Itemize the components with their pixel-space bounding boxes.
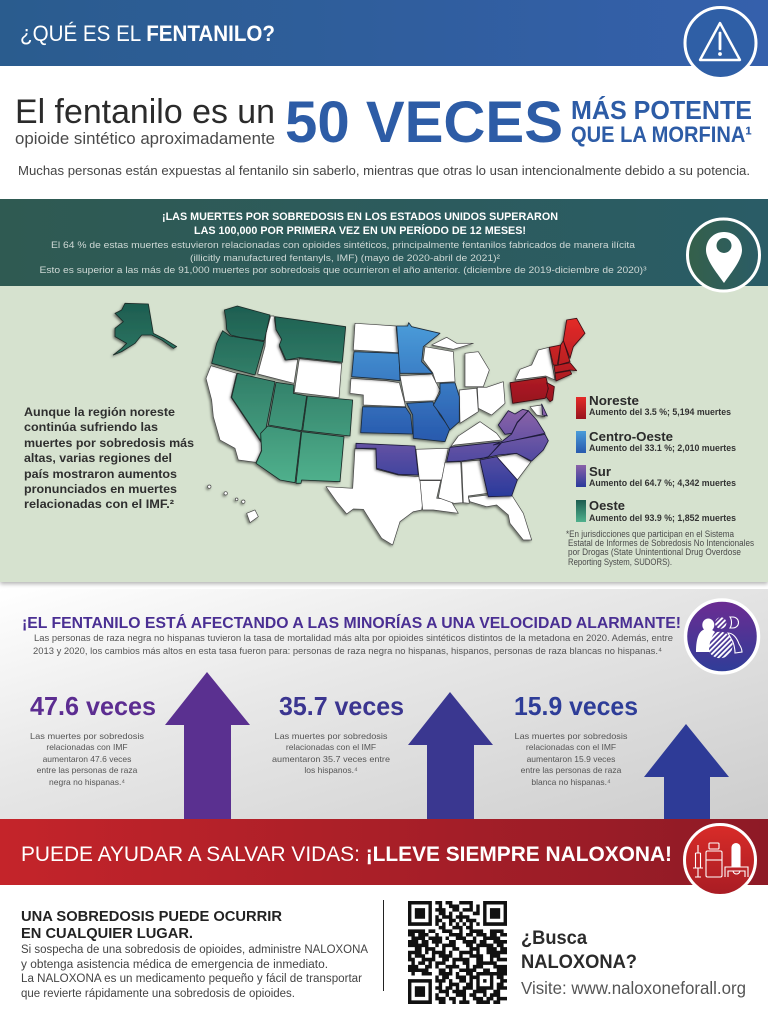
stat text: 47.6: negra no hispanas.⁴	[49, 777, 125, 787]
text block body	[21, 944, 368, 1000]
stat text: 15.9: entre las personas de raza	[521, 765, 622, 775]
stat text: 15.9: relacionadas con el IMF	[526, 742, 616, 752]
panel: map section background	[0, 286, 768, 582]
legend: sur: Aumento del 64.7 %; 4,342 muertes	[589, 478, 736, 488]
map: west region	[113, 303, 353, 483]
stat text: 47.6: entre las personas de raza	[37, 765, 138, 775]
text block: overdose can happen anywhere	[21, 909, 368, 1000]
icon: location pin circle	[688, 219, 760, 291]
text block heading: UNA SOBREDOSIS PUEDE OCURRIR	[21, 909, 283, 925]
stat text: 35.7: los hispanos.⁴	[304, 765, 358, 775]
headline lead: El fentanilo es un	[15, 93, 275, 131]
arrow: 15.9	[644, 724, 729, 819]
legend: centro-oeste: Centro-Oeste	[589, 429, 673, 444]
legend: centro-oeste: Aumento del 33.1 %; 2,010 muertes	[589, 443, 736, 453]
map side text: muertes por sobredosis más	[24, 436, 194, 450]
icon: people circle	[686, 600, 758, 673]
legend: sur: Sur	[589, 464, 611, 479]
intro sentence: Muchas personas están expuestas al fentanilo sin saberlo, mientras que otras lo usan intencionalmente debido a su potencia.	[18, 163, 750, 178]
stat: 47.6 veces: 47.6 veces	[30, 691, 156, 721]
band body text	[40, 240, 646, 276]
stat text: 47.6: relacionadas con IMF	[46, 742, 128, 752]
band body text: Esto es superior a las más de 91,000 muertes por sobredosis que ocurrieron el año anterior. (diciembre de 2019-diciembre de 2020)³	[40, 265, 646, 276]
panel: header band	[0, 0, 768, 66]
band heading: ¡LAS MUERTES POR SOBREDOSIS EN LOS ESTADOS UNIDOS SUPERARON	[162, 211, 558, 223]
stat text: 47.6: aumentaron 47.6 veces	[43, 754, 131, 764]
map footnote: por Drogas (State Unintentional Drug Overdose	[568, 547, 741, 557]
stat text: 15.9: blanca no hispanas.⁴	[531, 777, 611, 787]
legend: sur	[576, 464, 736, 488]
map side text	[24, 405, 194, 511]
stat text: 47.6: Las muertes por sobredosis	[30, 731, 144, 741]
question	[521, 928, 637, 973]
map side text: país mostraron aumentos	[24, 467, 177, 481]
headline sublead: opioide sintético aproximadamente	[15, 129, 275, 148]
question: NALOXONA?	[521, 951, 637, 973]
map: white states	[206, 316, 555, 545]
band body text: El 64 % de estas muertes estuvieron relacionadas con opioides sintéticos, principalmente fentanilos fabricados de manera ilícita	[51, 240, 636, 251]
stat: 35.7 veces: 35.7 veces	[279, 691, 404, 721]
panel: headline	[15, 90, 752, 155]
stat text: 35.7	[272, 731, 390, 775]
header title: ¿QUÉ ES EL FENTANILO?	[20, 21, 275, 46]
stat text: 35.7: Las muertes por sobredosis	[274, 731, 388, 741]
stat text: 15.9: aumentaron 15.9 veces	[527, 754, 615, 764]
map footnote	[566, 529, 754, 567]
panel: minorities section	[0, 589, 768, 819]
stat text: 47.6	[30, 731, 144, 787]
band heading	[162, 211, 558, 237]
map: south region	[356, 404, 548, 497]
legend	[576, 393, 736, 523]
map footnote: Reporting System, SUDORS).	[568, 557, 672, 567]
map side text: altas, varias regiones del	[24, 451, 172, 465]
text block body: Si sospecha de una sobredosis de opioides, administre NALOXONA	[21, 944, 368, 956]
arrow: 35.7	[408, 692, 493, 819]
chart: map of the United States	[113, 303, 585, 545]
map: northeast region	[510, 318, 585, 403]
naloxone finder text	[521, 928, 746, 998]
text block heading	[21, 909, 283, 942]
stat text: 15.9	[514, 731, 628, 787]
headline comparison	[571, 95, 752, 147]
headline comparison: QUE LA MORFINA¹	[571, 122, 752, 147]
naloxone band title: PUEDE AYUDAR A SALVAR VIDAS: ¡LLEVE SIEMPRE NALOXONA!	[21, 843, 672, 866]
question: ¿Busca	[521, 928, 587, 949]
text block body: que revierte rápidamente una sobredosis de opioides.	[21, 988, 295, 1000]
map: midwest region	[352, 323, 459, 442]
legend: oeste	[576, 498, 736, 523]
map side text: Aunque la región noreste	[24, 405, 175, 419]
arrow: 47.6	[165, 672, 250, 819]
legend: noreste: Aumento del 3.5 %; 5,194 muertes	[589, 407, 731, 417]
map side text: pronunciados en muertes	[24, 482, 177, 496]
headline comparison: MÁS POTENTE	[571, 95, 752, 125]
QR code	[408, 901, 507, 1004]
text block body: y obtenga asistencia médica de emergencia de inmediato.	[21, 959, 328, 971]
legend: noreste	[576, 393, 731, 419]
minorities body	[33, 633, 673, 657]
stat text: 15.9: Las muertes por sobredosis	[514, 731, 628, 741]
minorities heading: ¡EL FENTANILO ESTÁ AFECTANDO A LAS MINORÍAS A UNA VELOCIDAD ALARMANTE!	[22, 613, 681, 632]
panel: naloxone band	[0, 819, 768, 885]
map side text: relacionadas con el IMF.²	[24, 497, 174, 511]
panel: overdose deaths band	[0, 199, 768, 286]
divider	[383, 900, 384, 991]
headline number: 50 VECES	[285, 90, 563, 155]
legend: noreste: Noreste	[589, 393, 639, 408]
minorities body: 2013 y 2020, los cambios más altos en esta tasa fueron para: personas de raza negra no hispanas, hispanos, personas de raza blancas no hispanas.⁴	[33, 646, 662, 657]
stat text: 35.7: aumentaron 35.7 veces entre	[272, 754, 390, 764]
minorities body: Las personas de raza negra no hispanas tuvieron la tasa de mortalidad más alta por opioides sintéticos distintos de la metadona en 2020. Además, entre	[34, 633, 673, 644]
website: Visite: www.naloxoneforall.org	[521, 978, 746, 998]
icon: naloxone circle	[684, 824, 756, 896]
text block heading: EN CUALQUIER LUGAR.	[21, 926, 193, 942]
text block body: La NALOXONA es un medicamento pequeño y fácil de transportar	[21, 973, 362, 985]
legend: oeste: Oeste	[589, 498, 625, 513]
stat: 15.9 veces: 15.9 veces	[514, 691, 638, 721]
icon: warning circle	[685, 8, 756, 78]
band body text: (illicitly manufactured fentanyls, IMF) (mayo de 2020-abril de 2021)²	[190, 253, 500, 264]
stat text: 35.7: relacionadas con el IMF	[286, 742, 376, 752]
map side text: continúa sufriendo las	[24, 420, 158, 434]
legend: centro-oeste	[576, 429, 736, 453]
legend: oeste: Aumento del 93.9 %; 1,852 muertes	[589, 513, 736, 523]
band heading: LAS 100,000 POR PRIMERA VEZ EN UN PERÍODO DE 12 MESES!	[194, 224, 526, 237]
map footnote: *En jurisdicciones que participan en el Sistema	[566, 529, 734, 539]
